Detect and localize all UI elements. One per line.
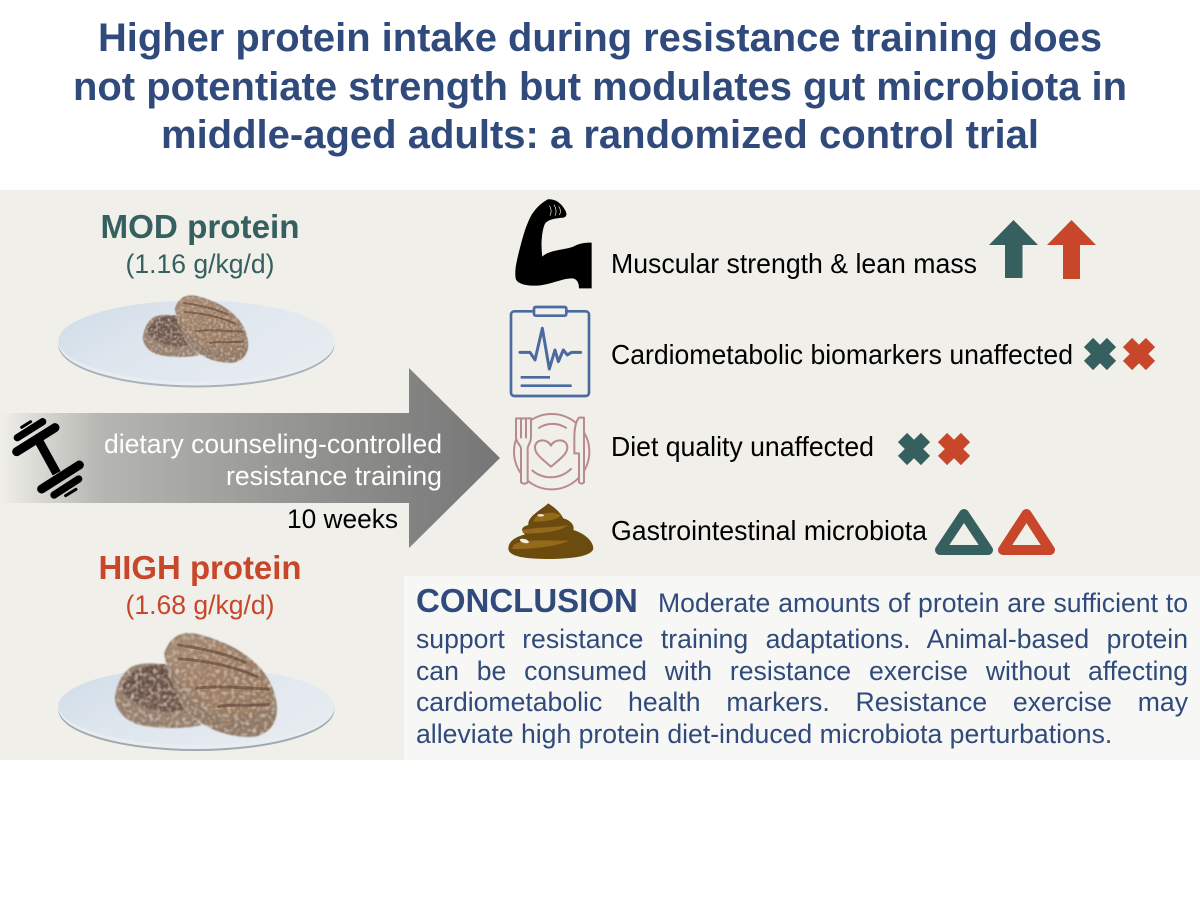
icon: plate with heart and cutlery [514,414,589,489]
heading: MOD protein group: (1.16 g/kg/d) [126,249,274,279]
icons: cross marks for diet quality [902,438,966,460]
icon: clipboard with heartbeat [511,307,589,396]
text: conclusion line 2: support resistance training adaptations. Animal-based protein [416,624,1188,654]
panel: background [0,190,1200,760]
image: plate with moderate protein patties [58,295,334,388]
icon: stool [508,503,593,559]
icon: flexed arm [515,199,592,288]
heading: MOD protein group: MOD protein [100,208,300,245]
heading: HIGH protein group: HIGH protein [98,549,302,586]
text: conclusion line 5: alleviate high protein diet-induced microbiota perturbations. [416,718,1112,748]
text: diet quality row label: Diet quality unaffected [611,431,874,462]
label: 10 weeks: 10 weeks [287,504,398,534]
icons: delta triangles [940,514,1050,550]
panel: conclusion [404,576,1200,760]
text: muscular strength row label: Muscular strength & lean mass [611,248,977,279]
text: gastrointestinal row label: Gastrointestinal microbiota [611,515,928,546]
heading: MOD protein group [100,208,300,279]
title: not potentiate strength but modulates gut microbiota in [73,65,1127,109]
label: dietary counseling-controlled resistance training: resistance training [226,461,442,491]
title: middle-aged adults: a randomized control trial [161,113,1039,157]
text: conclusion line 1: Moderate amounts of protein are sufficient to [658,588,1188,618]
heading: HIGH protein group: (1.68 g/kg/d) [126,590,274,620]
title: Higher protein intake during resistance training does [98,16,1102,60]
text: conclusion line 4: cardiometabolic health markers. Resistance exercise may [416,687,1188,717]
label: dietary counseling-controlled resistance training [104,429,442,491]
image: plate with high protein patties [58,633,334,751]
text: conclusion line 3: can be consumed with resistance exercise without affecting [416,656,1188,686]
title [73,16,1127,157]
heading: conclusion: CONCLUSION [416,582,638,619]
text: cardiometabolic row label: Cardiometabolic biomarkers unaffected [611,339,1073,370]
icon: dumbbell [17,422,79,496]
label: dietary counseling-controlled resistance training: dietary counseling-controlled [104,429,442,459]
heading: HIGH protein group [98,549,302,620]
icons: cross marks for cardiometabolic [1088,342,1150,366]
icons: up arrows [989,220,1096,279]
arrow: training direction [0,368,500,548]
